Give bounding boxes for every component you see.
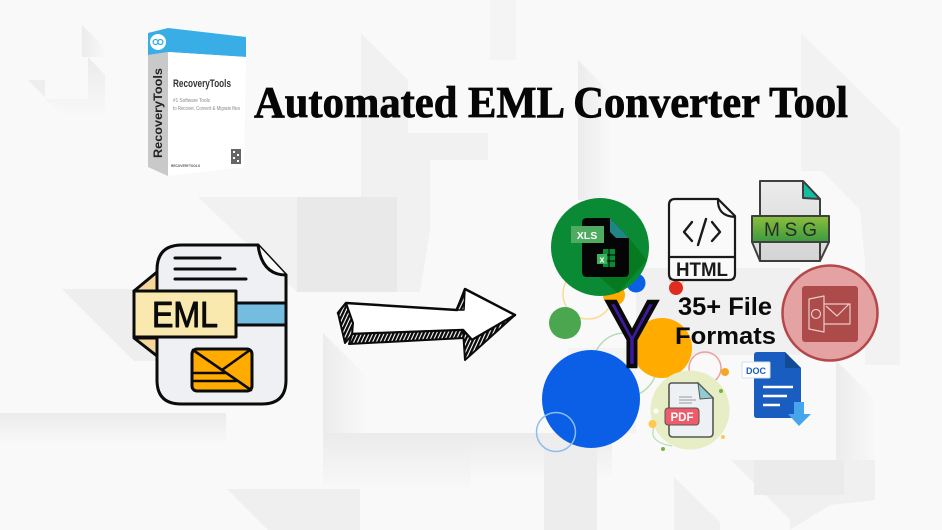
document [157, 245, 286, 404]
icon: PDF file: PDF [670, 412, 694, 424]
icon: MSG file [752, 181, 829, 261]
product box: RecoveryTools [173, 78, 231, 90]
icon: HTML file [669, 199, 735, 281]
icon: XLS: XLS [577, 230, 597, 242]
product box: RecoveryTools [153, 68, 165, 158]
decorative circles cluster [536, 269, 721, 452]
arrow head bottom hatch [463, 315, 515, 360]
EML label: EML [152, 294, 218, 335]
heading: 35+ file formats: Formats [675, 323, 776, 350]
icon: XLS: x [599, 254, 605, 264]
product box: to Recover, Convert & Migrate files [173, 106, 240, 112]
product box [148, 28, 246, 176]
icon: DOC file [742, 352, 811, 426]
QR code [231, 149, 241, 164]
arrow tail hatch [338, 303, 353, 343]
icon: EML file [134, 245, 286, 404]
icon: PDF file [648, 368, 730, 451]
product box: RECOVERYTOOLS [171, 164, 201, 168]
icon: XLS [551, 198, 649, 296]
heading: 35+ file formats: 35+ File [678, 293, 772, 321]
heading: 35+ file formats [675, 293, 776, 350]
icon: Outlook [782, 266, 878, 360]
logo [150, 34, 166, 50]
arrow band hatch [349, 330, 464, 344]
icon: HTML file: HTML [676, 260, 728, 281]
box front [168, 52, 246, 176]
blue band [236, 303, 286, 325]
icon: MSG file: MSG [764, 220, 817, 241]
box side [148, 52, 168, 176]
box top [148, 28, 246, 57]
text lines [175, 258, 246, 279]
icon: DOC file: DOC [746, 366, 766, 376]
arrow [338, 289, 515, 360]
ribbon fold [134, 338, 157, 356]
envelope [192, 349, 252, 391]
arrow head top hatch [456, 289, 465, 310]
Y letter: Y [606, 282, 658, 386]
title: Automated EML Converter Tool [254, 78, 848, 127]
ribbon back [134, 272, 157, 291]
product box: #1 Software Tools [173, 98, 210, 104]
EML label [134, 291, 236, 337]
